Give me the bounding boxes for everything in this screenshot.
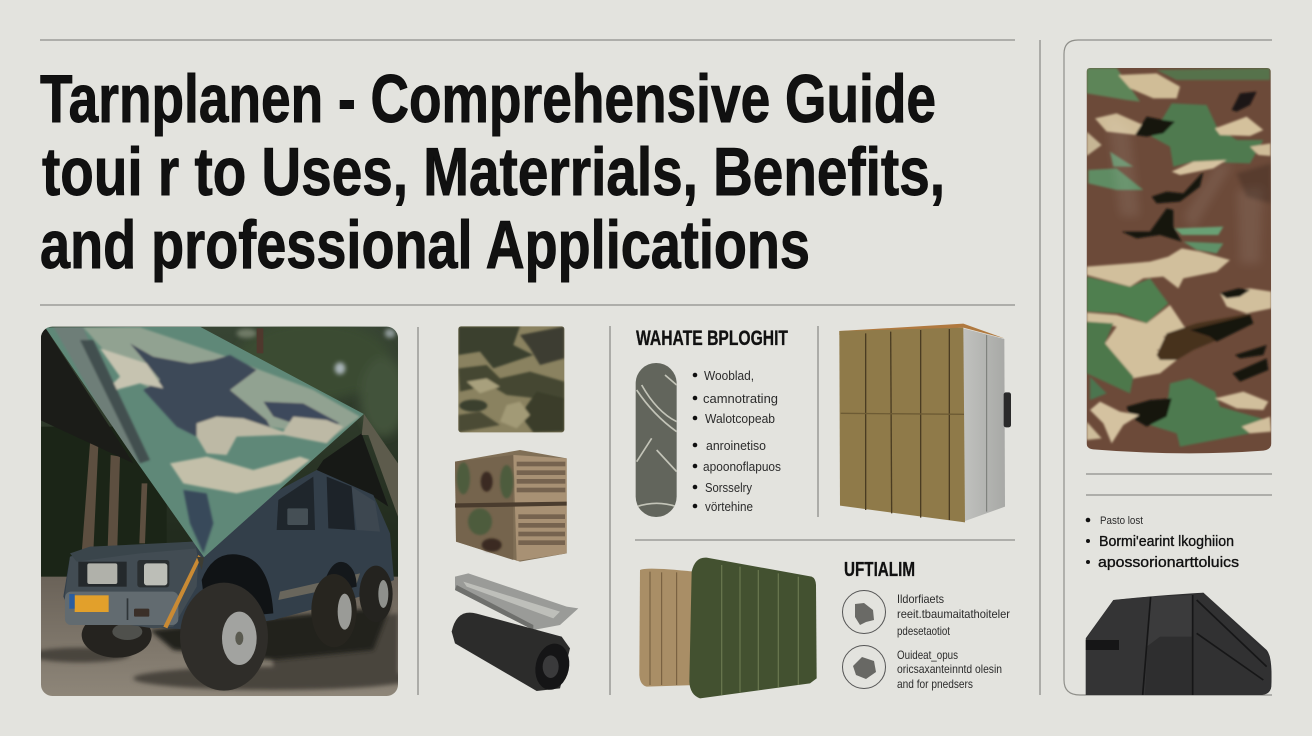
application bullet text: Pasto lost <box>1100 515 1143 527</box>
material bullet list <box>693 368 781 514</box>
section heading: uses: UFTIALIM <box>844 559 915 581</box>
photo: camouflage tarp over vehicle <box>30 320 413 700</box>
dark awning right <box>317 433 388 507</box>
tan pouch cabinet <box>839 324 1011 522</box>
use item one: icon and text <box>842 590 1010 638</box>
use item two: icon and text: and for pnedsers <box>897 677 973 691</box>
icon: textured emblem <box>842 590 886 634</box>
section heading: materials: WAHATE BPLOGHIT <box>636 327 788 350</box>
material bullet list: camnotrating <box>703 391 778 406</box>
use item two: icon and text <box>842 646 1002 691</box>
dark awning left <box>40 327 133 463</box>
use item one: icon and text: pdesetaotiot <box>897 624 951 638</box>
material bullet list: vörtehine <box>705 499 753 514</box>
title: Tarnplanen - Comprehensive Guide <box>40 61 936 137</box>
material bullet list: anroinetiso <box>706 438 766 453</box>
title <box>40 61 945 283</box>
right panel outline <box>1064 40 1272 695</box>
camouflage perforated case <box>455 450 567 562</box>
use item one: icon and text: reeit.tbaumaitathoiteler <box>897 607 1010 621</box>
tree trunks <box>82 328 263 553</box>
title: and professional Applications <box>40 207 810 283</box>
application bullet text <box>1086 515 1239 571</box>
black vehicle cover <box>1083 590 1275 697</box>
large camouflage banner <box>1083 63 1275 460</box>
application bullet text: Bormi'earint lkoghiion <box>1099 533 1234 550</box>
vehicle body <box>63 470 394 630</box>
icon: textured emblem <box>842 646 886 688</box>
olive and tan folded tarps <box>639 558 817 698</box>
metal case and black roll <box>452 573 578 693</box>
material bullet list: apoonoflapuos <box>703 459 781 474</box>
use item two: icon and text: Ouideat_opus <box>897 648 958 662</box>
front wheel behind bumper <box>82 625 152 658</box>
material bullet list: Wooblad, <box>704 368 754 383</box>
material bullet list: Sorsselry <box>705 480 752 495</box>
application bullet text: apossorionarttoluics <box>1098 554 1239 571</box>
camouflage fabric swatch <box>458 326 564 432</box>
use item one: icon and text: Ildorfiaets <box>897 592 944 606</box>
title: toui r to Uses, Materrials, Benefits, <box>42 134 945 210</box>
icon: grey capsule pattern <box>636 363 677 517</box>
tarp camouflage <box>45 327 364 557</box>
material bullet list: Walotcopeab <box>705 411 775 426</box>
wheels <box>180 566 393 691</box>
use item two: icon and text: oricsaxanteinntd olesin <box>897 662 1002 676</box>
